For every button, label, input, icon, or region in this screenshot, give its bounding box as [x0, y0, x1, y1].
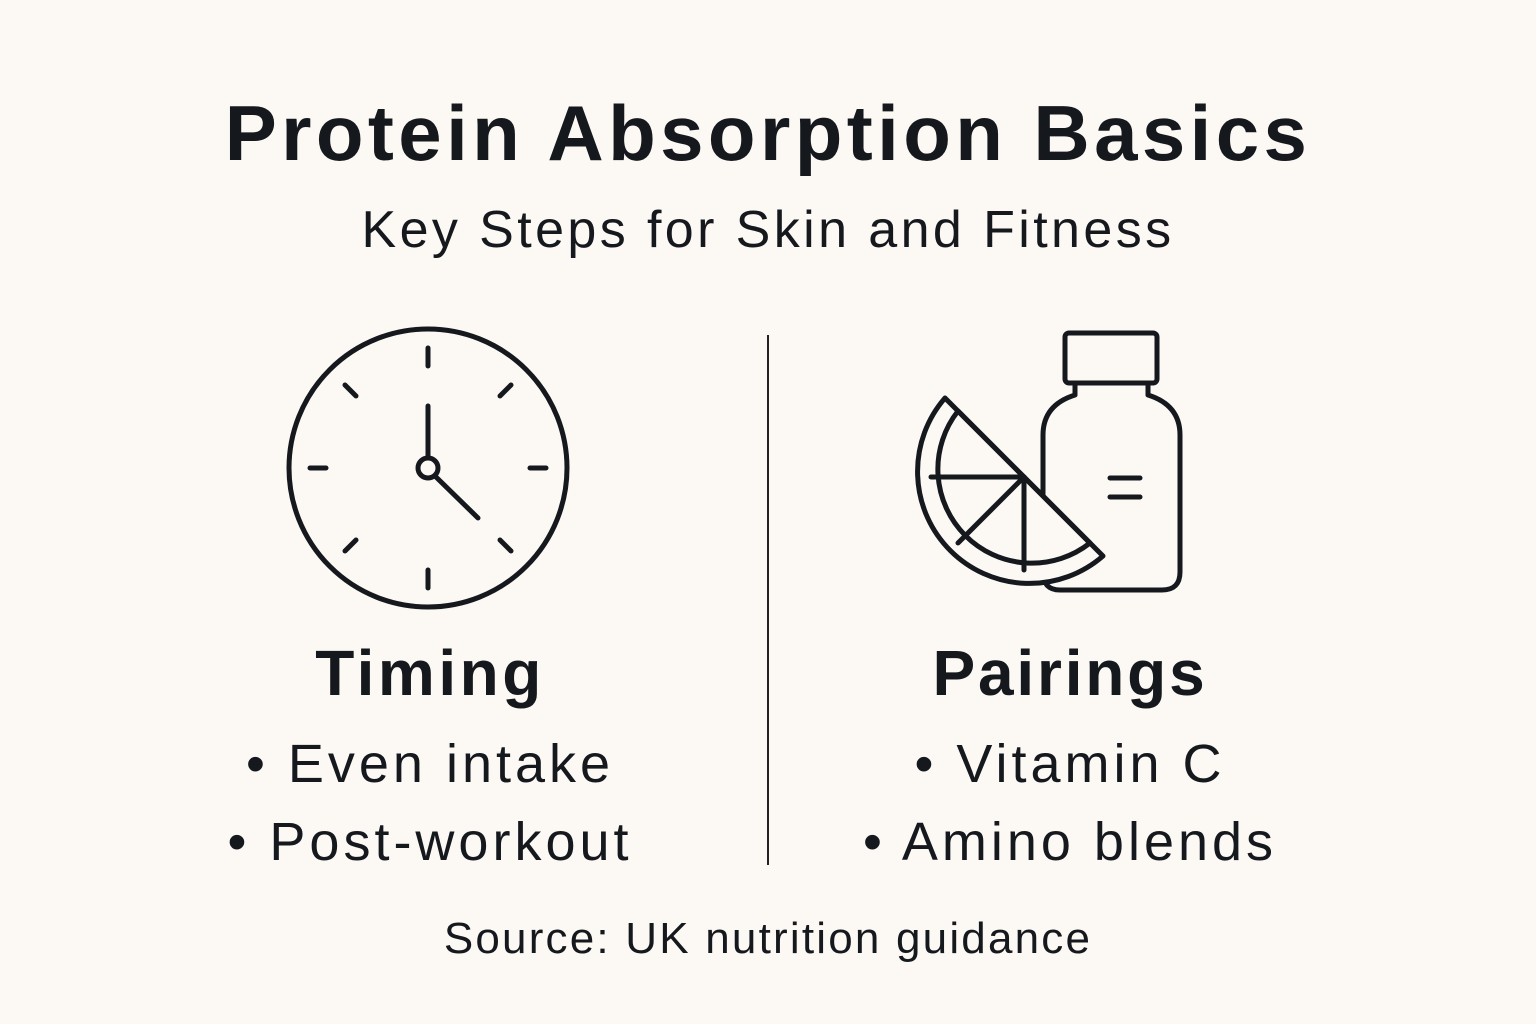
bullets: timing: • Post-workout — [227, 812, 633, 872]
icon: clock — [286, 326, 570, 610]
bullets: pairings: • Amino blends — [863, 812, 1277, 872]
heading: Timing: Timing — [315, 637, 545, 709]
title: Protein Absorption Basics — [225, 89, 1311, 177]
heading: Pairings: Pairings — [933, 637, 1207, 709]
bullets: pairings: • Vitamin C — [914, 734, 1226, 794]
subtitle: Key Steps for Skin and Fitness — [361, 201, 1174, 259]
bullets: timing — [227, 734, 633, 872]
divider — [767, 335, 769, 865]
icon: lemon and bottle — [915, 330, 1182, 592]
bullets: timing: • Even intake — [246, 734, 614, 794]
bullets: pairings — [863, 734, 1277, 872]
source note: Source: UK nutrition guidance — [444, 914, 1092, 963]
